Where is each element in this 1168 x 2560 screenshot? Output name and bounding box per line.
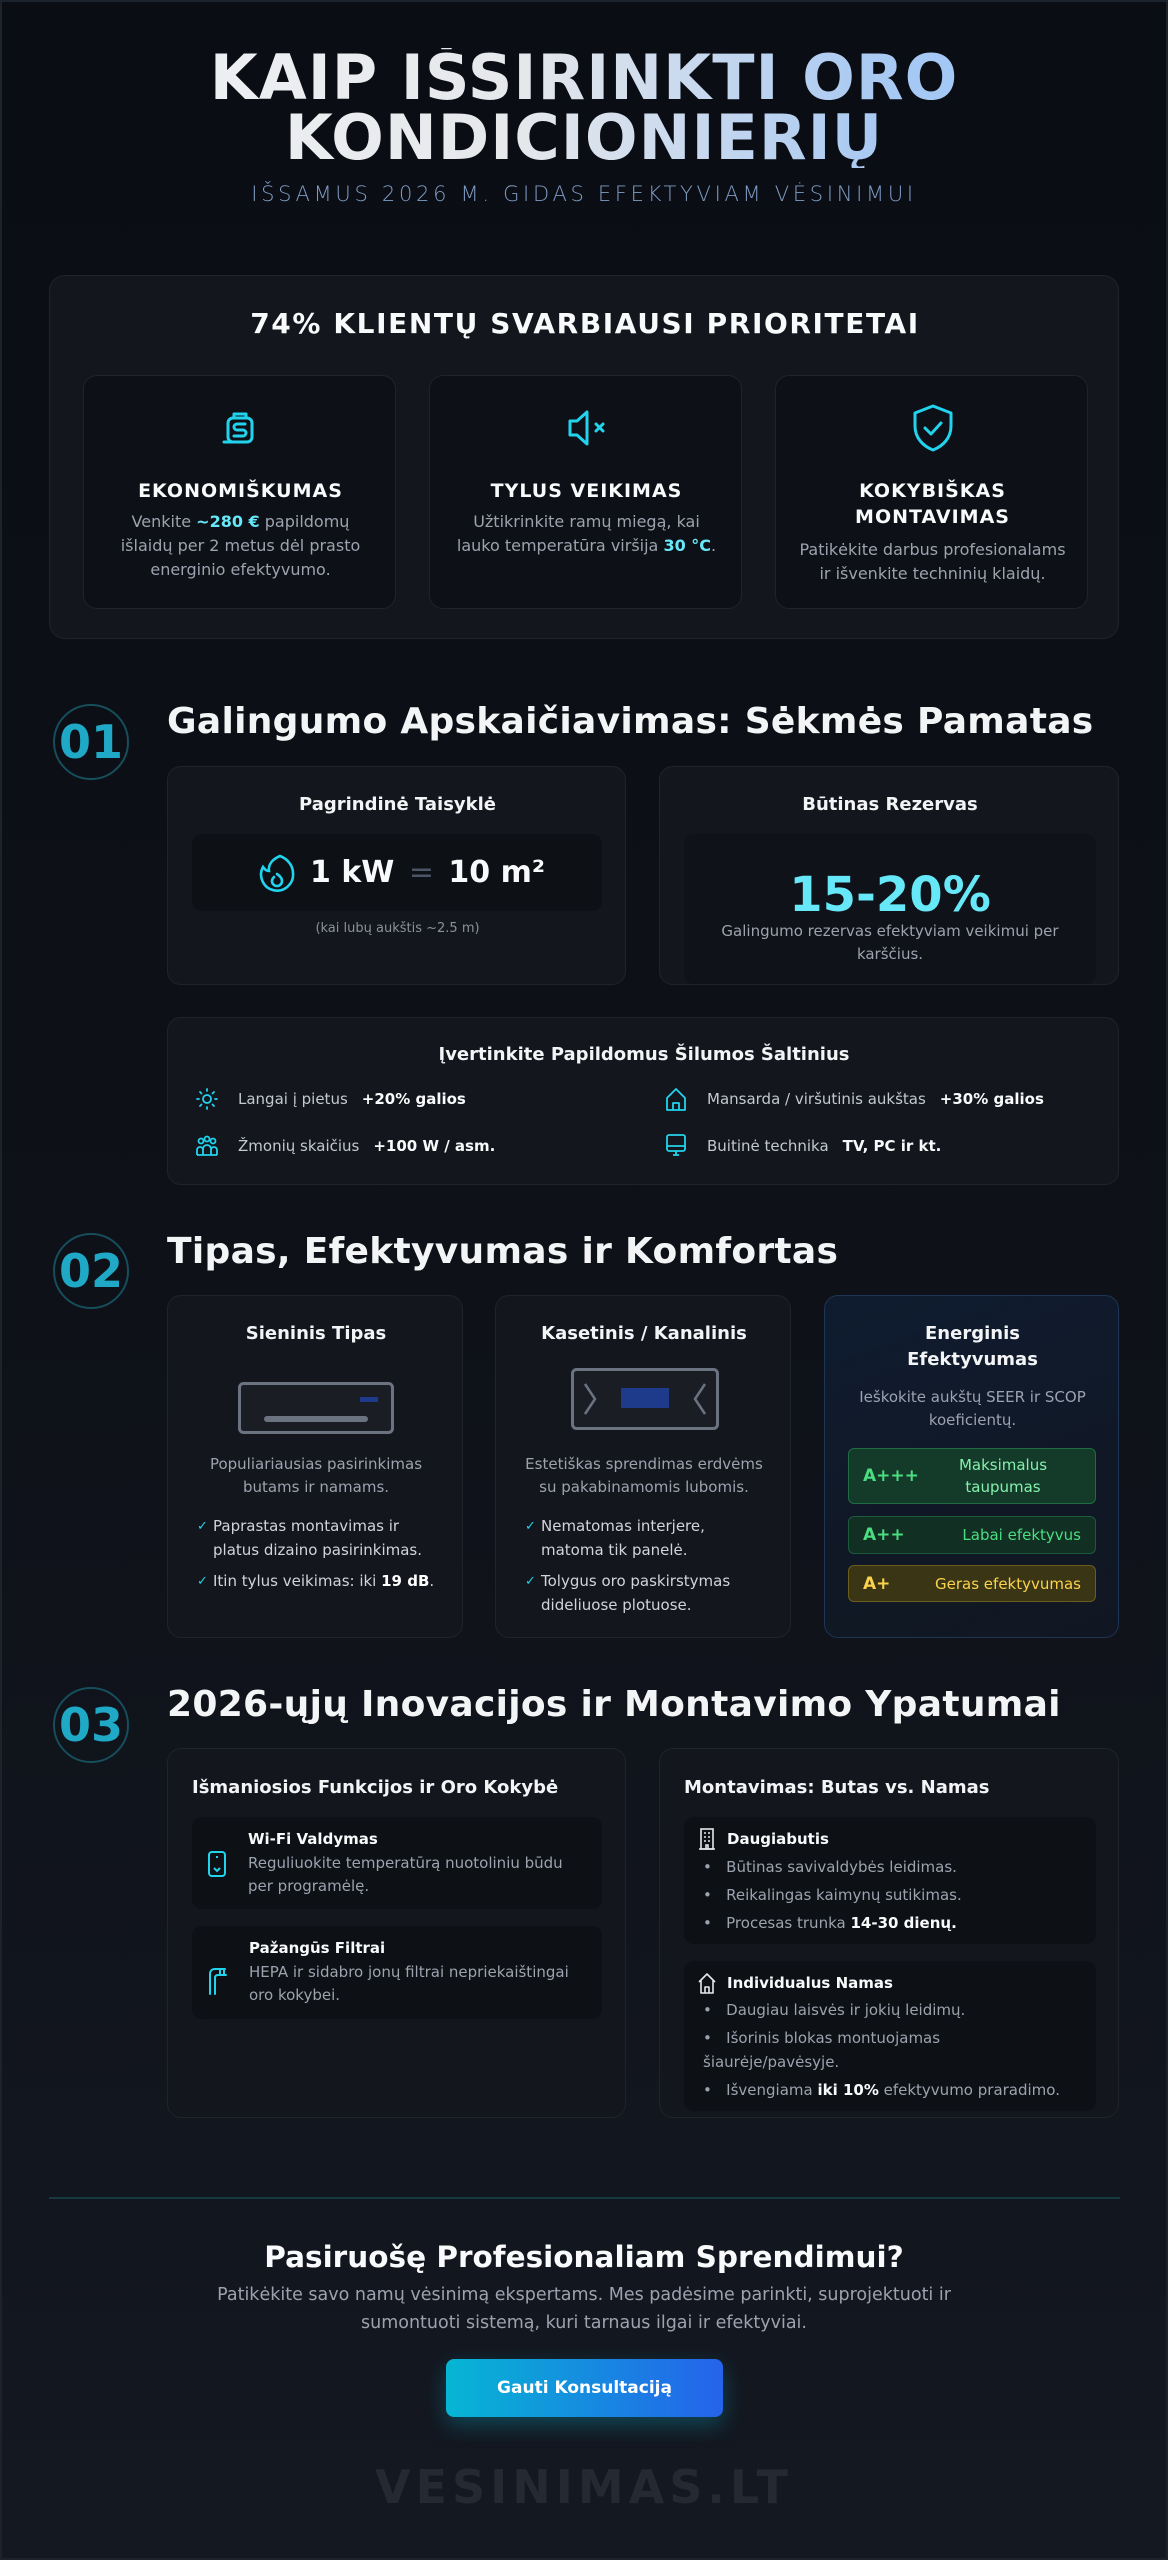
heading: TYLUS VEIKIMAS bbox=[491, 480, 682, 502]
note: (kai lubų aukštis ~2.5 m) bbox=[315, 921, 480, 936]
checklist: Paprastas montavimas ir platus dizaino pasirinkimas. bbox=[213, 1517, 422, 1559]
item: windows: Langai į pietus bbox=[238, 1090, 348, 1108]
section title 02: Tipas, Efektyvumas ir Komfortas bbox=[167, 1231, 838, 1272]
cta button bbox=[446, 2359, 723, 2417]
bullets: • Daugiau laisvės ir jokių leidimų. bbox=[703, 2001, 965, 2019]
section title 03: 2026-ųjų Inovacijos ir Montavimo Ypatumai bbox=[167, 1684, 1061, 1725]
card: kokybiskas bbox=[775, 375, 1088, 609]
badge A+ bbox=[848, 1565, 1096, 1602]
description: Populiariausias pasirinkimas butams ir namams. bbox=[210, 1455, 422, 1496]
heading: Montavimas: Butas vs. Namas bbox=[684, 1777, 989, 1798]
text: Reguliuokite temperatūrą nuotoliniu būdu per programėlę. bbox=[248, 1854, 563, 1895]
box: apartment bbox=[684, 1817, 1096, 1944]
icon: filter bbox=[209, 1968, 227, 1995]
title: Individualus Namas bbox=[727, 1974, 893, 1992]
heading: Pagrindinė Taisyklė bbox=[299, 794, 496, 815]
item: attic: Mansarda / viršutinis aukštas bbox=[707, 1090, 926, 1108]
section number 03: 03 bbox=[59, 1698, 123, 1752]
cta heading: Pasiruošę Profesionaliam Sprendimui? bbox=[264, 2240, 904, 2274]
icon: cassette unit bbox=[571, 1368, 719, 1430]
cta button: Gauti Konsultaciją bbox=[497, 2378, 672, 2398]
badge A+: A+ bbox=[863, 1574, 890, 1594]
card: ekonomiskumas bbox=[83, 375, 396, 609]
heading: Sieninis Tipas bbox=[246, 1323, 386, 1344]
card: energinis efektyvumas bbox=[824, 1295, 1119, 1638]
icon: house bbox=[698, 1973, 716, 1994]
icon: flame bbox=[260, 854, 294, 892]
text: Galingumo rezervas efektyviam veikimui per karščius. bbox=[721, 922, 1059, 963]
heading: KOKYBIŠKAS bbox=[859, 480, 1006, 502]
bullets: • Išvengiama iki 10% efektyvumo praradimo. bbox=[703, 2081, 1060, 2099]
icon: mute speaker bbox=[568, 410, 605, 446]
heading: Energinis bbox=[925, 1323, 1020, 1344]
bullets: • Būtinas savivaldybės leidimas. bbox=[703, 1858, 957, 1876]
item: people bbox=[196, 1136, 495, 1156]
card: kasetinis bbox=[495, 1295, 791, 1638]
badge A++ bbox=[848, 1516, 1096, 1554]
heading: Kasetinis / Kanalinis bbox=[541, 1323, 747, 1344]
item: windows bbox=[196, 1088, 466, 1110]
text: Patikėkite darbus profesionalams ir išvenkite techninių klaidų. bbox=[799, 540, 1066, 583]
title: Wi-Fi Valdymas bbox=[248, 1830, 378, 1848]
section number 03 bbox=[53, 1687, 129, 1763]
heading bbox=[855, 480, 1010, 528]
item: people: Žmonių skaičius bbox=[238, 1137, 359, 1155]
card: smart functions bbox=[167, 1748, 626, 2118]
checklist bbox=[199, 1517, 434, 1590]
badge A+++: Maksimalus taupumas bbox=[959, 1456, 1047, 1496]
bullets: • Reikalingas kaimynų sutikimas. bbox=[703, 1886, 962, 1904]
section number 02: 02 bbox=[59, 1244, 123, 1298]
heading: Išmaniosios Funkcijos ir Oro Kokybė bbox=[192, 1777, 558, 1798]
item: people: +100 W / asm. bbox=[373, 1137, 495, 1155]
badge A+++: A+++ bbox=[863, 1466, 919, 1486]
box: house bbox=[684, 1961, 1096, 2111]
icon: building bbox=[699, 1828, 715, 1850]
bullets bbox=[703, 2001, 1060, 2099]
card: installation bbox=[659, 1748, 1119, 2118]
card: sieninis bbox=[167, 1295, 463, 1638]
item: attic bbox=[666, 1088, 1044, 1111]
title bbox=[0, 48, 1168, 168]
reserve box bbox=[684, 834, 1096, 984]
card: pagrindine taisykle bbox=[167, 766, 626, 985]
box: filters bbox=[192, 1926, 602, 2019]
section number 02 bbox=[53, 1233, 129, 1309]
panel: heat sources bbox=[167, 1017, 1119, 1185]
description: Estetiškas sprendimas erdvėms su pakabinamomis lubomis. bbox=[525, 1455, 763, 1496]
heading bbox=[907, 1323, 1038, 1370]
panel: priorities bbox=[49, 275, 1119, 639]
title: KONDICIONIERIŲ bbox=[285, 101, 883, 174]
badge A+: Geras efektyvumas bbox=[935, 1574, 1081, 1592]
title: Daugiabutis bbox=[727, 1830, 829, 1848]
subtitle: IŠSAMUS 2026 M. GIDAS EFEKTYVIAM VĖSINIMUI bbox=[251, 182, 917, 206]
badge A++: Labai efektyvus bbox=[962, 1526, 1081, 1544]
heading: EKONOMIŠKUMAS bbox=[138, 480, 343, 502]
section number 01: 01 bbox=[59, 715, 123, 769]
checklist: Tolygus oro paskirstymas dideliuose plotuose. bbox=[541, 1572, 730, 1614]
title: KAIP IŠSIRINKTI ORO bbox=[210, 41, 958, 114]
item: windows: +20% galios bbox=[362, 1090, 466, 1108]
badge A++: A++ bbox=[863, 1525, 905, 1545]
badge A+++ bbox=[848, 1448, 1096, 1504]
bullets: • Išorinis blokas montuojamas šiaurėje/pavėsyje. bbox=[703, 2029, 940, 2071]
text: HEPA ir sidabro jonų filtrai nepriekaištingai oro kokybei. bbox=[249, 1963, 569, 2004]
icon: phone bbox=[208, 1851, 226, 1877]
checklist bbox=[527, 1517, 730, 1614]
text: Ieškokite aukštų SEER ir SCOP koeficientų. bbox=[859, 1388, 1086, 1429]
big number: 15-20% bbox=[789, 867, 991, 923]
formula: 1 kW = 10 m² bbox=[310, 855, 545, 890]
item: appliances bbox=[666, 1134, 941, 1156]
section title 01: Galingumo Apskaičiavimas: Sėkmės Pamatas bbox=[167, 701, 1094, 742]
box: wifi bbox=[192, 1817, 602, 1909]
bullets: • Procesas trunka 14-30 dienų. bbox=[703, 1914, 957, 1932]
text: Užtikrinkite ramų miegą, kai lauko temperatūra viršija 30 °C. bbox=[457, 512, 716, 555]
icon: wall unit bbox=[238, 1382, 394, 1434]
icon: money bbox=[222, 412, 254, 444]
icon: shield bbox=[914, 404, 952, 452]
footer brand: VESINIMAS.LT bbox=[375, 2460, 793, 2514]
text: Venkite ~280 € papildomų išlaidų per 2 metus dėl prasto energinio efektyvumo. bbox=[121, 512, 360, 579]
heading: MONTAVIMAS bbox=[855, 506, 1010, 528]
heading: Būtinas Rezervas bbox=[802, 794, 978, 815]
priorities heading: 74% KLIENTŲ SVARBIAUSI PRIORITETAI bbox=[250, 307, 920, 340]
checklist: Itin tylus veikimas: iki 19 dB. bbox=[213, 1572, 434, 1590]
heading: Efektyvumas bbox=[907, 1349, 1038, 1370]
item: appliances: Buitinė technika bbox=[707, 1137, 829, 1155]
card: tylus bbox=[429, 375, 742, 609]
title: Pažangūs Filtrai bbox=[249, 1939, 385, 1957]
cta text: Patikėkite savo namų vėsinimą ekspertams. Mes padėsime parinkti, suprojektuoti ir sumontuoti sistemą, kuri tarnaus ilgai ir efektyviai. bbox=[217, 2285, 951, 2333]
bullets bbox=[703, 1858, 962, 1932]
section number 01 bbox=[53, 704, 129, 780]
formula box bbox=[192, 834, 602, 911]
checklist: Nematomas interjere, matoma tik panelė. bbox=[541, 1517, 705, 1559]
item: appliances: TV, PC ir kt. bbox=[843, 1137, 941, 1155]
card: butinas rezervas bbox=[659, 766, 1119, 985]
heading: Įvertinkite Papildomus Šilumos Šaltinius bbox=[438, 1044, 850, 1065]
item: attic: +30% galios bbox=[940, 1090, 1044, 1108]
